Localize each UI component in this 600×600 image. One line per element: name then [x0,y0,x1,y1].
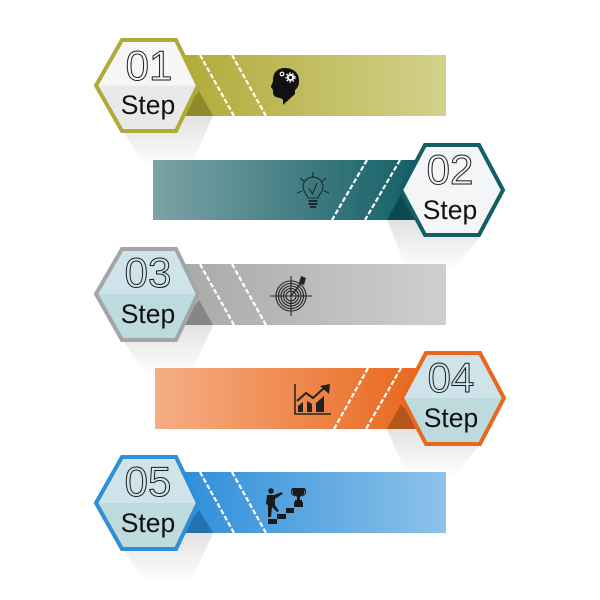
label step 01: Step [121,90,175,120]
hexagon shadow 04 [387,429,480,478]
number 03: 03 [125,249,171,296]
dashed stitches 04 [334,368,401,429]
hexagon shadow 02 [387,220,480,272]
label step 05: Step [121,508,175,538]
hexagon shadow 05 [123,533,213,584]
dashed stitches 03 [200,264,266,325]
hexagon shadow 03 [123,325,213,376]
panel: step 03 [96,249,446,376]
ribbon 02 [153,160,420,220]
label step 02: Step [423,195,477,225]
hexagon 04 [402,353,504,444]
number 01: 01 [126,42,172,89]
label step 04: Step [424,403,478,433]
number 04: 04 [428,354,474,401]
label step 03: Step [121,299,175,329]
hexagon shadow 01 [123,116,213,168]
hexagon 01 [96,40,198,131]
panel: step 05 [96,457,446,584]
ribbon 05 [180,472,446,533]
icon: climber with trophy [266,488,306,524]
dashed stitches 02 [332,160,400,220]
dashed stitches 01 [200,55,266,116]
hexagon 02 [401,145,503,235]
hexagon 03 [96,249,198,340]
ribbon fold 04 [387,404,420,429]
panel: step 02 [153,145,503,272]
number 02: 02 [427,146,473,193]
ribbon 03 [180,264,446,325]
icon: target with dart [270,276,312,316]
ribbon fold 02 [387,194,420,220]
icon: light bulb with check [297,172,329,207]
dashed stitches 05 [200,472,266,533]
ribbon 04 [155,368,420,429]
panel: step 04 [155,353,504,478]
panel: step 01 [96,40,446,168]
ribbon fold 03 [180,300,213,325]
ribbon 01 [180,55,446,116]
icon: head with gears [271,68,299,105]
icon: growth chart [295,384,331,414]
number 05: 05 [125,458,171,505]
ribbon fold 01 [180,91,213,116]
hexagon 05 [96,457,198,549]
ribbon fold 05 [180,510,213,533]
